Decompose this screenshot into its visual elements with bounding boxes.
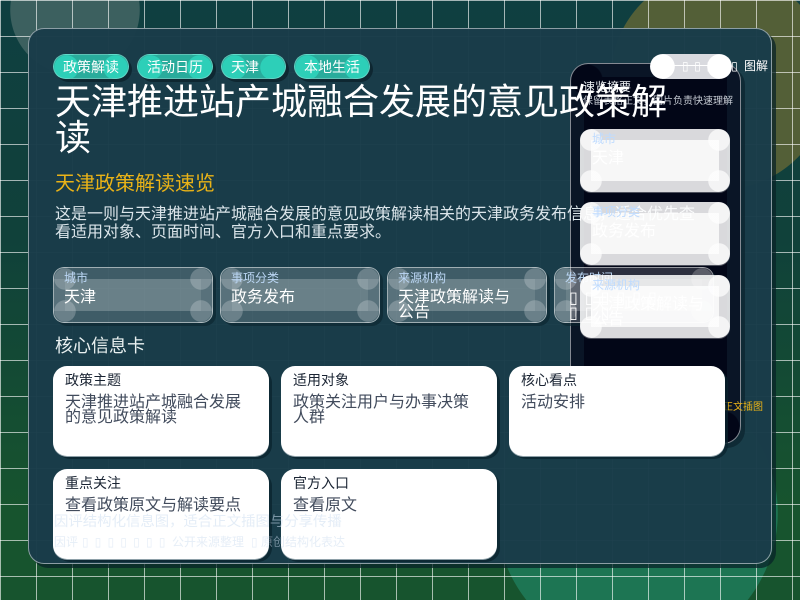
stat card: 来源机构: 来源机构 bbox=[398, 271, 446, 285]
core card: 适用对象: 适用对象 bbox=[293, 372, 349, 388]
pill: 天津 bbox=[221, 54, 286, 79]
footer source note: 因评 bbox=[54, 535, 78, 549]
stat card: 发布时间 bbox=[554, 267, 714, 323]
phone card: 来源机构: 公告 bbox=[592, 311, 624, 328]
phone card: 事项分类 bbox=[580, 202, 730, 265]
core card: 官方入口: 查看原文 bbox=[293, 497, 357, 514]
core card: 适用对象 bbox=[281, 366, 497, 456]
background circle: bottom teal bbox=[496, 372, 778, 600]
intro paragraph: 看适用对象、页面时间、官方入口和重点要求。 bbox=[55, 224, 391, 241]
core card: 核心看点: 活动安排 bbox=[521, 394, 585, 411]
core card: 政策主题: 天津推进站产城融合发展 bbox=[65, 394, 241, 411]
footer source note: ▯ bbox=[251, 535, 258, 549]
subtitle: 天津政策解读速览 bbox=[55, 173, 215, 195]
phone card: 城市: 天津 bbox=[592, 150, 624, 167]
background circle: top right olive bbox=[610, 0, 800, 190]
stat card: 发布时间: ▯▯▯▯▯▯ bbox=[569, 288, 664, 307]
background circle: top left bbox=[10, 0, 140, 75]
footer source note: 公开来源整理 bbox=[172, 535, 244, 549]
core card: 重点关注: 查看政策原文与解读要点 bbox=[65, 497, 241, 514]
stat card: 事项分类 bbox=[220, 267, 380, 323]
stat card: 事项分类: 事项分类 bbox=[231, 271, 279, 285]
stat card: 城市: 城市 bbox=[64, 271, 88, 285]
intro paragraph bbox=[55, 205, 695, 241]
core card: 核心看点 bbox=[509, 366, 725, 456]
phone card: 城市: 城市 bbox=[592, 132, 616, 146]
phone card: 来源机构: 来源机构 bbox=[592, 278, 640, 292]
intro paragraph: 这是一则与天津推进站产城融合发展的意见政策解读相关的天津政务发布信息，适合优先查 bbox=[55, 206, 695, 223]
stat card: 来源机构: 公告 bbox=[398, 304, 430, 321]
top-right label: 图解 bbox=[744, 59, 768, 73]
phone card: 事项分类: 政务发布 bbox=[592, 223, 656, 240]
footer source note bbox=[54, 535, 345, 549]
footer line: 因评结构化信息图，适合正文插图与分享传播 bbox=[54, 514, 342, 530]
core card: 官方入口: 官方入口 bbox=[293, 475, 349, 491]
stat card: 事项分类: 政务发布 bbox=[231, 289, 295, 306]
pill: 活动日历: 活动日历 bbox=[147, 59, 203, 75]
core card: 政策主题: 的意见政策解读 bbox=[65, 409, 177, 426]
stat card: 发布时间: 发布时间 bbox=[565, 271, 613, 285]
top-right label: ▯▯▯▯▯ bbox=[682, 59, 744, 73]
phone panel background bbox=[570, 63, 741, 444]
top-right pill bbox=[650, 54, 732, 79]
yellow caption: 正文插图 bbox=[723, 402, 763, 413]
core card: 适用对象: 政策关注用户与办事决策 bbox=[293, 394, 469, 411]
stat card: 发布时间: ▯▯▯ bbox=[569, 303, 616, 322]
stat card: 城市: 天津 bbox=[64, 289, 96, 306]
core card: 适用对象: 人群 bbox=[293, 409, 325, 426]
pill: 天津: 天津 bbox=[231, 59, 259, 75]
phone card: 城市 bbox=[580, 129, 730, 192]
core card: 政策主题: 政策主题 bbox=[65, 372, 121, 388]
core card: 官方入口 bbox=[281, 469, 497, 559]
stat card: 来源机构 bbox=[387, 267, 547, 323]
phone card: 事项分类: 事项分类 bbox=[592, 205, 640, 219]
title: 天津推进站产城融合发展的意见政策解读 bbox=[55, 81, 667, 158]
core card: 重点关注: 重点关注 bbox=[65, 475, 121, 491]
pill: 本地生活 bbox=[294, 54, 370, 79]
pill: 政策解读 bbox=[53, 54, 129, 79]
core card: 核心看点: 核心看点 bbox=[521, 372, 577, 388]
phone card: 来源机构: 天津政策解读与 bbox=[592, 296, 704, 313]
core card: 重点关注 bbox=[53, 469, 269, 559]
phone card: 来源机构 bbox=[580, 275, 730, 338]
stat card: 城市 bbox=[53, 267, 213, 323]
phone summary heading: 速览摘要 bbox=[583, 80, 631, 94]
phone summary note: 保留表格正文，图片负责快速理解 bbox=[583, 96, 733, 107]
footer source note: 原创结构化表达 bbox=[261, 535, 345, 549]
pill: 活动日历 bbox=[137, 54, 213, 79]
pill: 本地生活: 本地生活 bbox=[304, 59, 360, 75]
tag pills bbox=[53, 54, 373, 82]
pill: 政策解读: 政策解读 bbox=[63, 59, 119, 75]
core card: 政策主题 bbox=[53, 366, 269, 456]
footer source note: ▯▯▯▯▯▯▯ bbox=[82, 535, 172, 549]
section heading: 核心信息卡 bbox=[55, 336, 145, 356]
stat card: 来源机构: 天津政策解读与 bbox=[398, 289, 510, 306]
